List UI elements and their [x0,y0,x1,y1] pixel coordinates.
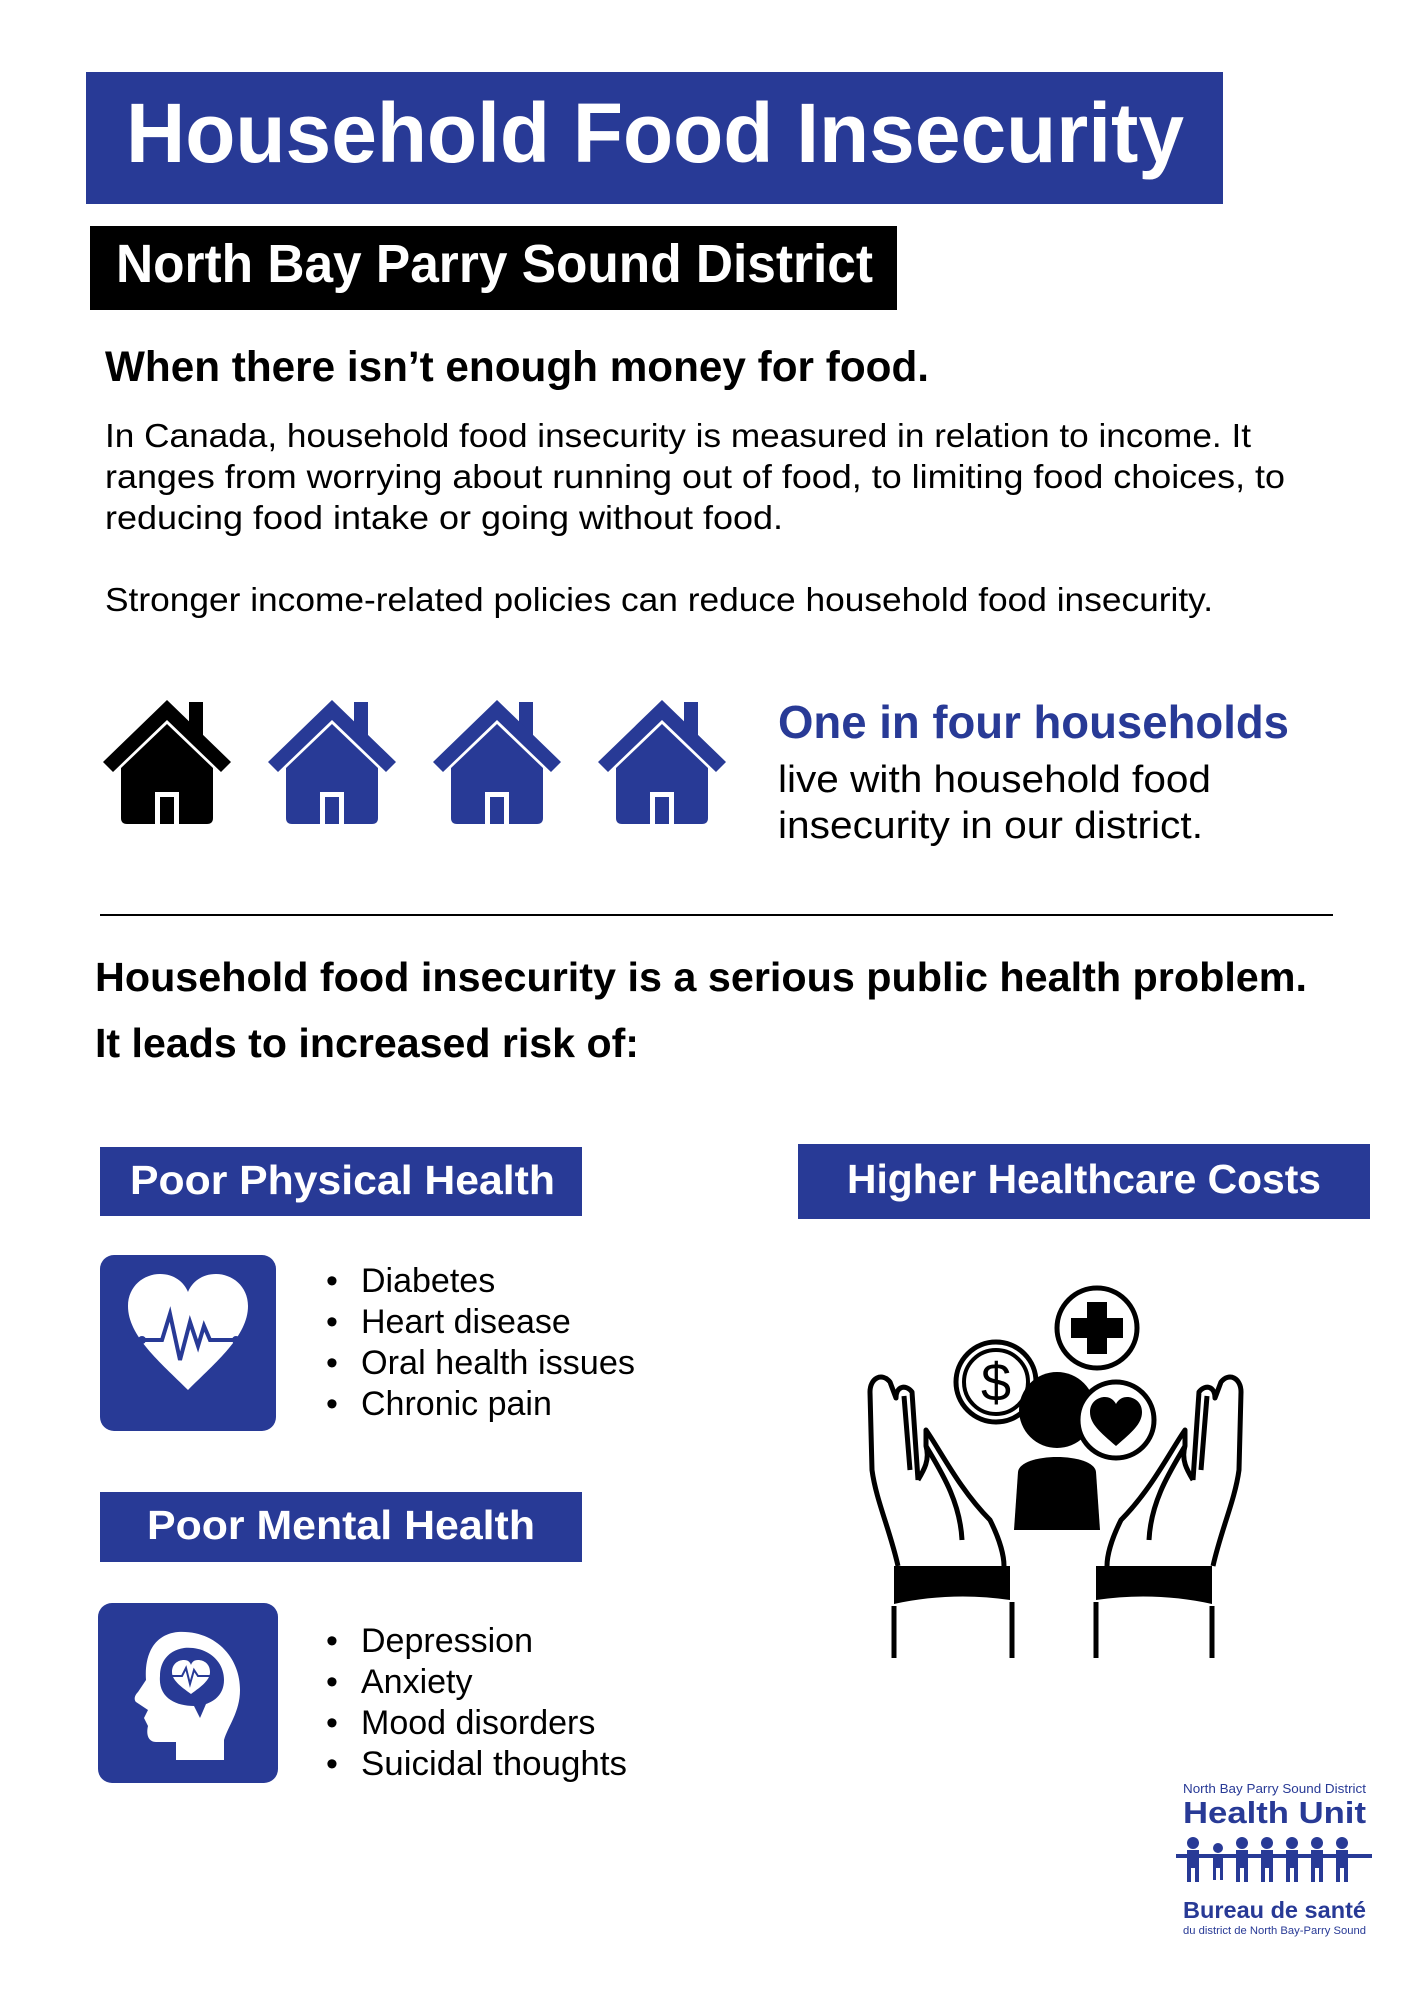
icon: house black [103,700,231,824]
header: higher healthcare costs: Higher Healthcare Costs [847,1156,1321,1202]
cuffs [894,1566,1010,1604]
list: mental health: • [326,1663,338,1701]
icon row: houses [103,700,726,824]
left hand [870,1377,1004,1566]
list: physical health: Diabetes [361,1262,495,1300]
icon: hands holding healthcare costs [870,1288,1241,1658]
header: poor mental health [100,1492,582,1562]
list: physical health: • [326,1303,338,1341]
list: mental health: Mood disorders [361,1704,595,1742]
subtitle banner [90,226,897,310]
list: mental health: Anxiety [361,1663,472,1701]
stat callout: insecurity in our district. [778,805,1203,847]
logo: health unit: Health Unit [1183,1795,1366,1830]
list: physical health: Heart disease [361,1303,571,1341]
title banner: Household Food Insecurity [126,86,1184,180]
header: higher healthcare costs [798,1144,1370,1219]
icon: house blue 3 [598,700,726,824]
list: physical health [326,1262,635,1423]
stat callout [778,696,1289,847]
logo: health unit: North Bay Parry Sound District [1183,1781,1366,1796]
list: mental health: • [326,1704,338,1742]
heading: public health problem: It leads to increased risk of: [95,1020,639,1066]
subtitle banner: North Bay Parry Sound District [116,234,873,294]
heading: money for food: When there isn’t enough money for food. [105,343,929,391]
icon: house blue 1 [268,700,396,824]
intro paragraph: In Canada, household food insecurity is measured in relation to income. It [105,417,1251,454]
logo: health unit: du district de North Bay-Parry Sound [1183,1925,1366,1937]
stat callout: One in four households [778,696,1289,748]
logo: health unit [1176,1781,1372,1937]
heading: public health problem: Household food insecurity is a serious public health problem. [95,954,1307,1000]
stat callout: live with household food [778,759,1211,801]
list: mental health: Suicidal thoughts [361,1745,627,1783]
list: mental health: Depression [361,1622,533,1660]
intro paragraph: reducing food intake or going without food. [105,499,783,536]
heart coin [1078,1382,1154,1458]
plus coin [1057,1288,1137,1368]
title banner [86,72,1223,204]
right hand [1107,1377,1241,1566]
dollar coin [956,1342,1036,1422]
icon: house blue 2 [433,700,561,824]
person [1019,1372,1095,1448]
list: mental health [326,1622,627,1783]
list: physical health: Oral health issues [361,1344,635,1382]
icon: head with brain [98,1603,278,1783]
header: poor physical health: Poor Physical Health [130,1157,555,1203]
logo: health unit: Bureau de santé [1183,1897,1366,1923]
header: poor mental health: Poor Mental Health [147,1502,535,1548]
list: physical health: Chronic pain [361,1385,552,1423]
list: physical health: • [326,1262,338,1300]
list: mental health: • [326,1622,338,1660]
policy statement: Stronger income-related policies can reduce household food insecurity. [105,581,1213,618]
heading: public health problem [95,954,1307,1066]
intro paragraph [105,417,1285,536]
list: mental health: • [326,1745,338,1783]
intro paragraph: ranges from worrying about running out of food, to limiting food choices, to [105,458,1285,495]
icon: hands holding healthcare costs: $ [981,1353,1011,1413]
list: physical health: • [326,1385,338,1423]
header: poor physical health [100,1147,582,1216]
list: physical health: • [326,1344,338,1382]
icon: heart with pulse [100,1255,276,1431]
